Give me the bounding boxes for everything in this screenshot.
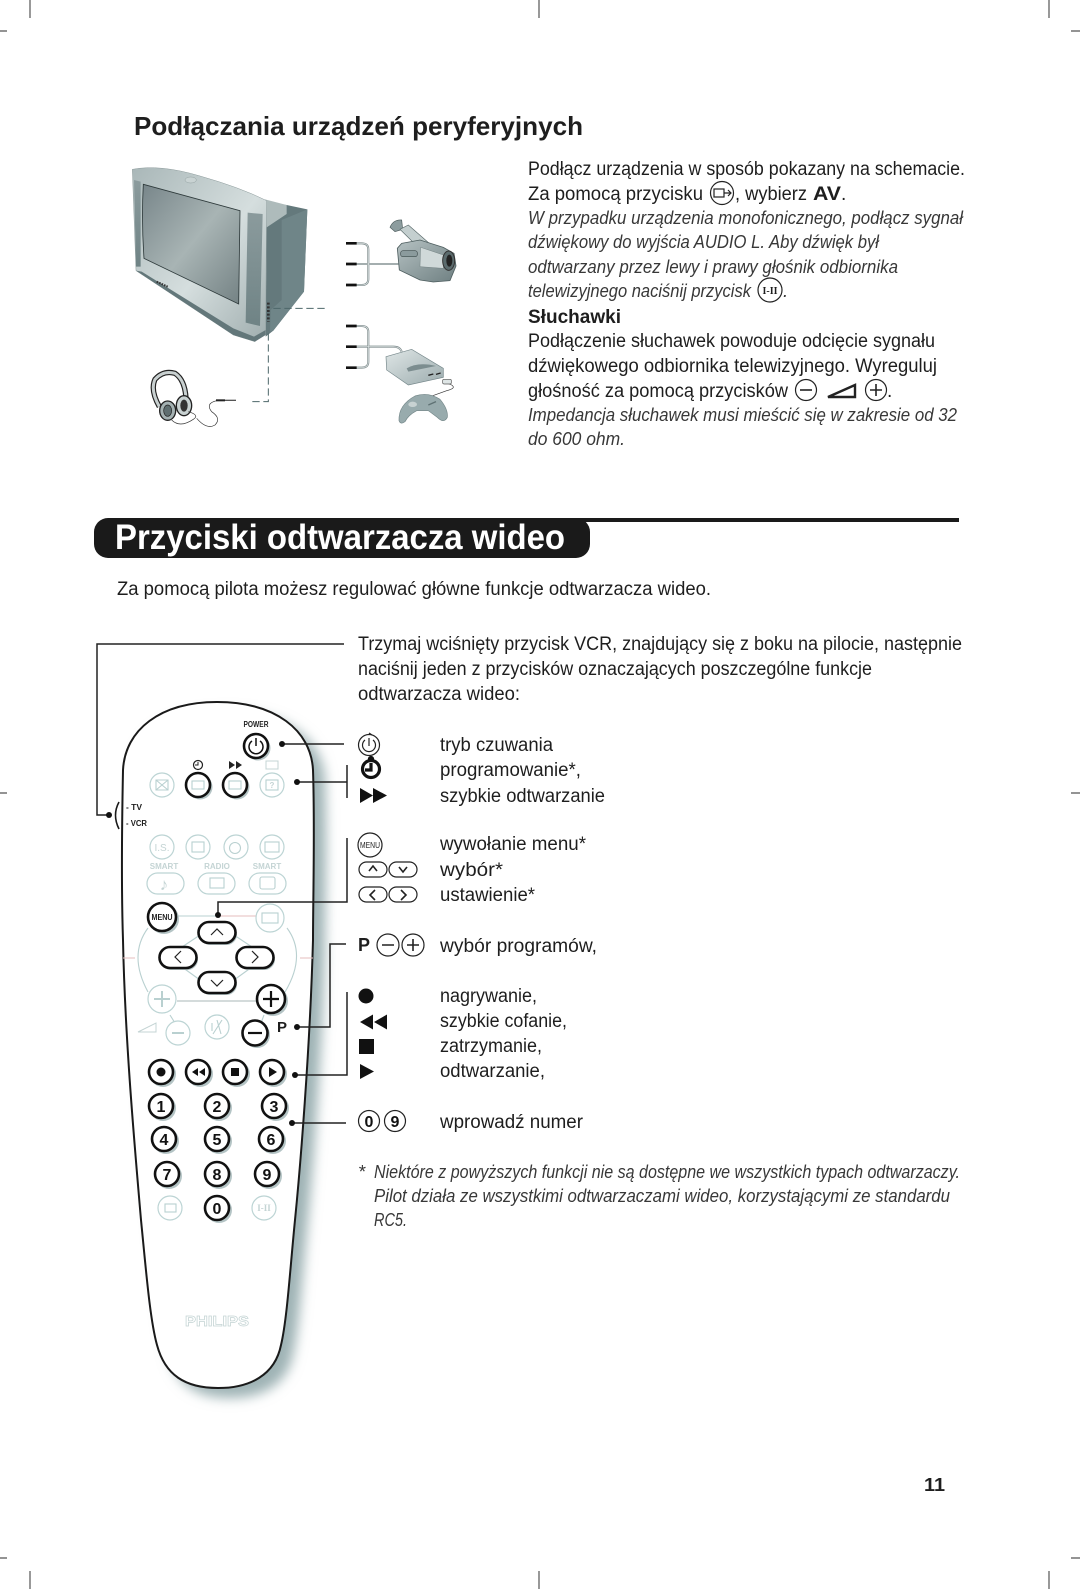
icon: digits — [358, 1110, 406, 1132]
number keypad: 0 — [213, 1201, 222, 1218]
icon: digits: 0 — [365, 1114, 374, 1131]
icon: fast forward — [360, 788, 387, 803]
button row 1 — [150, 773, 284, 800]
instruction paragraph: naciśnij jeden z przycisków oznaczających poszczególne funkcje — [358, 659, 872, 680]
footnote — [358, 1161, 960, 1230]
footnote: RC5. — [374, 1209, 407, 1230]
number keypad: 6 — [267, 1132, 276, 1149]
icon: game console — [386, 349, 453, 397]
smart labels: SMART — [150, 862, 178, 871]
icon: gamepad — [399, 394, 447, 423]
legend labels: wybór programów, — [439, 936, 597, 957]
text block: connection instructions: Słuchawki — [528, 307, 621, 328]
volume and programme buttons — [138, 985, 288, 1048]
side switch — [116, 802, 119, 829]
number keypad: 1 — [157, 1099, 166, 1116]
text block: connection instructions: . — [783, 280, 788, 301]
section banner — [94, 518, 959, 558]
remote control — [116, 702, 326, 1398]
icon: headphones — [153, 372, 236, 426]
text block: connection instructions: telewizyjnego naciśnij przycisk — [528, 280, 753, 301]
legend labels: tryb czuwania — [440, 735, 553, 756]
icon: left and right — [359, 887, 417, 902]
button row 2 — [150, 835, 284, 859]
footnote: Pilot działa ze wszystkimi odtwarzaczami wideo, korzystającymi ze standardu — [374, 1185, 950, 1206]
text block: connection instructions: dźwiękowy do wyjścia AUDIO L. Aby dźwięk był — [528, 231, 880, 252]
number keypad: 5 — [213, 1132, 222, 1149]
icon: menu: MENU — [360, 841, 380, 850]
teletext button — [256, 904, 284, 932]
text block: connection instructions: do 600 ohm. — [528, 428, 625, 449]
switch labels — [126, 803, 147, 828]
text block: connection instructions: Impedancja słuchawek musi mieścić się w zakresie od 32 — [528, 404, 958, 425]
direction pills — [160, 922, 275, 995]
smart labels: RADIO — [204, 862, 230, 871]
power button: POWER — [244, 720, 269, 729]
brand logo: PHILIPS — [185, 1313, 249, 1330]
instruction paragraph: Trzymaj wciśnięty przycisk VCR, znajdujący się z boku na pilocie, następnie — [358, 634, 962, 655]
text block: connection instructions: , wybierz — [735, 184, 807, 205]
icon: programme — [358, 934, 424, 956]
diagram: TV connections — [132, 168, 456, 426]
legend labels: odtwarzanie, — [440, 1061, 545, 1082]
icon: programme: P — [358, 935, 370, 955]
icon: camcorder — [390, 220, 456, 282]
dashed connection lines — [250, 308, 328, 402]
number keypad: 2 — [213, 1099, 222, 1116]
text block: connection instructions: głośność za pomocą przycisków — [528, 381, 788, 402]
icon: volume buttons — [796, 380, 886, 400]
icon: play — [360, 1064, 374, 1079]
input and sound buttons — [158, 1196, 276, 1220]
transport buttons — [149, 1060, 287, 1087]
number keypad: 4 — [160, 1132, 169, 1149]
text block: connection instructions — [528, 159, 965, 449]
text block: connection instructions: odtwarzany przez lewy i prawy głośnik odbiornika — [528, 256, 898, 277]
legend icons — [358, 733, 424, 1132]
button row 2: I.S. — [154, 843, 170, 854]
text block: connection instructions: Za pomocą przycisku — [528, 184, 703, 205]
instruction paragraph — [358, 634, 962, 705]
legend labels: nagrywanie, — [440, 986, 537, 1007]
legend labels: wywołanie menu* — [439, 834, 587, 855]
input and sound buttons: I-II — [257, 1203, 271, 1213]
remote shadow — [135, 712, 326, 1398]
text block: connection instructions: Podłączenie słuchawek powoduje odcięcie sygnału — [528, 331, 935, 352]
callout lines — [97, 644, 347, 1126]
text block: connection instructions: W przypadku urządzenia monofonicznego, podłącz sygnał — [528, 207, 964, 228]
menu button — [148, 903, 179, 934]
button row 1: ? — [270, 781, 275, 790]
number keypad: 9 — [263, 1167, 272, 1184]
page number: 11 — [924, 1475, 945, 1495]
footnote: Niektóre z powyższych funkcji nie są dostępne we wszystkich typach odtwarzaczy. — [374, 1161, 960, 1182]
legend labels: wprowadź numer — [439, 1112, 584, 1133]
instruction paragraph: odtwarzacza wideo: — [358, 684, 520, 705]
icon: AV input button — [710, 182, 734, 204]
smart labels: SMART — [253, 862, 281, 871]
switch labels: - VCR — [126, 819, 147, 828]
legend labels — [439, 735, 605, 1133]
footnote: * — [358, 1161, 366, 1182]
number keypad: 8 — [213, 1167, 222, 1184]
navigation guides — [123, 916, 313, 1023]
icon: timer — [362, 758, 380, 778]
legend labels: programowanie*, — [440, 760, 581, 781]
legend labels: szybkie odtwarzanie — [440, 786, 605, 807]
top row icons — [194, 760, 278, 770]
icon: digits: 9 — [391, 1114, 400, 1131]
pill buttons: ♪ — [160, 875, 168, 894]
legend labels: szybkie cofanie, — [440, 1011, 567, 1032]
legend labels: zatrzymanie, — [440, 1036, 542, 1057]
icon: record — [358, 988, 374, 1004]
legend labels: ustawienie* — [440, 885, 536, 906]
icon: standby — [358, 733, 380, 756]
menu button: MENU — [152, 913, 173, 922]
icon: rewind — [360, 1014, 387, 1030]
icon: I-II button: I-II — [762, 286, 778, 297]
volume and programme buttons: P — [277, 1019, 287, 1036]
icon: up and down — [359, 862, 417, 877]
text block: connection instructions: Podłącz urządzenia w sposób pokazany na schemacie. — [528, 159, 965, 180]
text block: connection instructions: . — [887, 381, 892, 402]
text block: connection instructions: AV — [813, 184, 841, 205]
power button — [244, 720, 270, 760]
camera cables — [346, 243, 398, 285]
heading: connecting peripherals: Podłączania urządzeń peryferyjnych — [134, 111, 583, 141]
TV set — [132, 168, 307, 342]
icon: I-II button — [758, 278, 782, 302]
text block: connection instructions: . — [841, 184, 846, 205]
pill buttons — [147, 873, 286, 894]
icon: stop — [359, 1039, 374, 1054]
legend labels: wybór* — [439, 860, 504, 881]
banner title: Przyciski odtwarzacza wideo — [115, 518, 565, 557]
number keypad — [149, 1094, 289, 1223]
text block: connection instructions: dźwiękowego odbiornika telewizyjnego. Wyreguluj — [528, 356, 937, 377]
console cables — [346, 326, 402, 368]
intro sentence: Za pomocą pilota możesz regulować główne funkcje odtwarzacza wideo. — [117, 579, 711, 600]
number keypad: 7 — [163, 1167, 172, 1184]
smart labels — [150, 862, 281, 871]
remote body — [122, 702, 314, 1388]
number keypad: 3 — [270, 1099, 279, 1116]
switch labels: - TV — [126, 803, 143, 812]
icon: menu — [358, 833, 382, 857]
